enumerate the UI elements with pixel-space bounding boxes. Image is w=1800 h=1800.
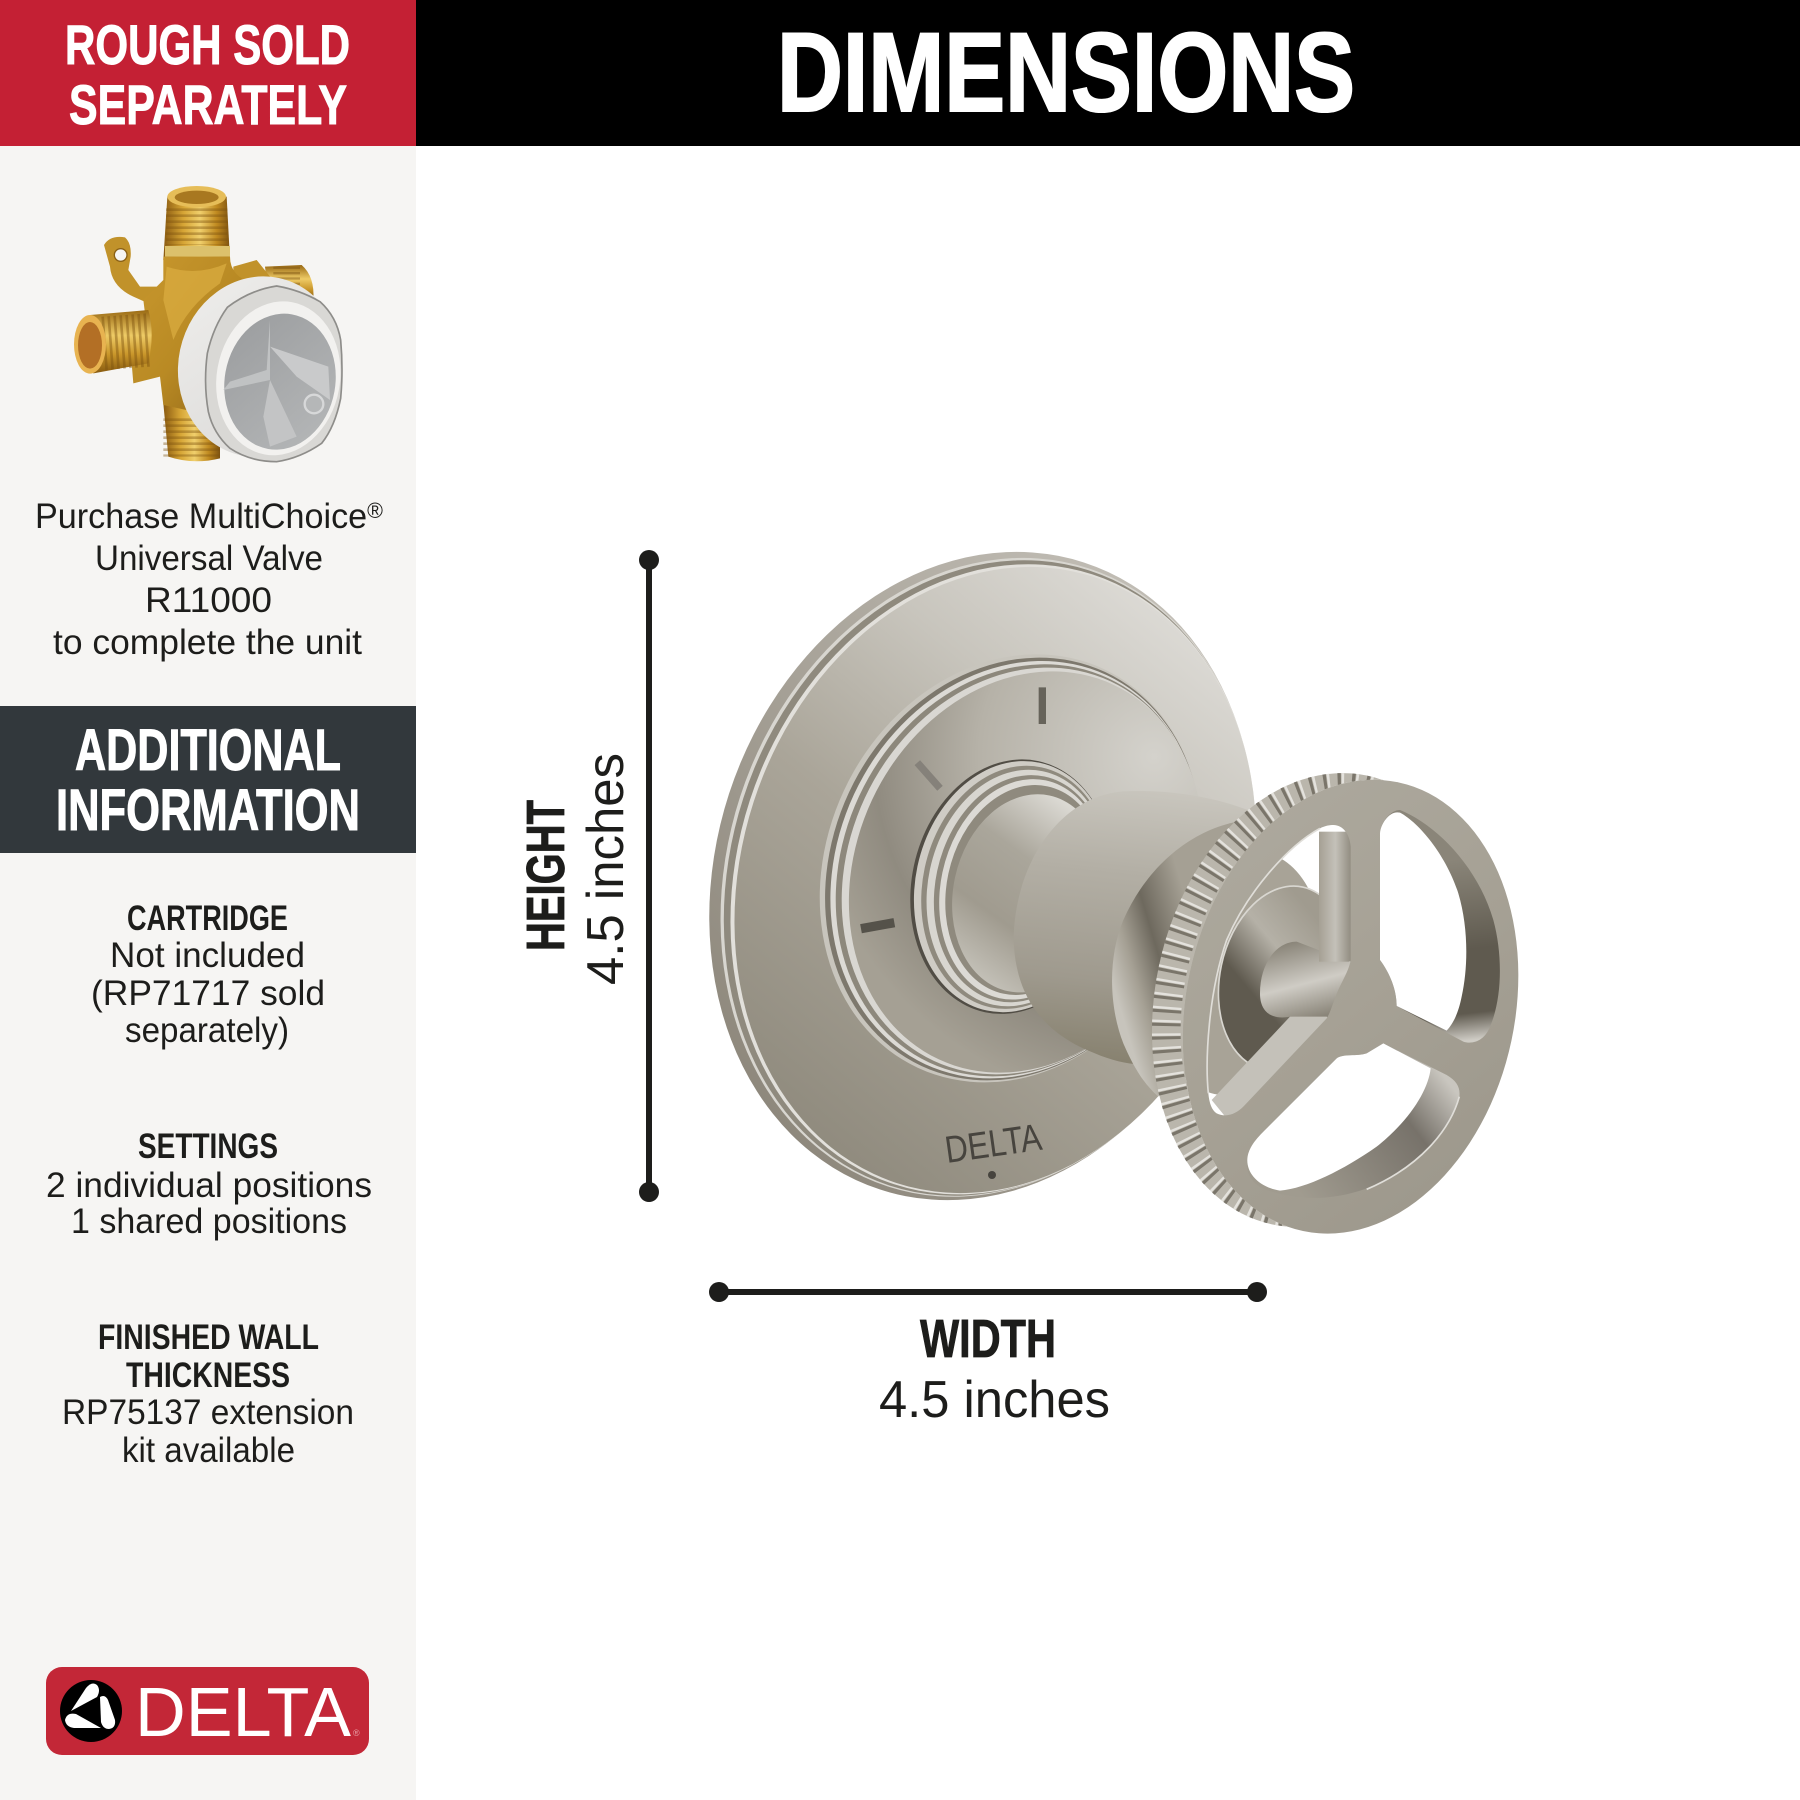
heading: rough sold: ROUGH SOLD [65,13,350,76]
upper right opening [1380,810,1500,1043]
label: width: WIDTH [920,1309,1056,1369]
collar rings [887,740,1136,1033]
hub flange [1112,819,1253,1097]
text block: finished wall thickness [62,1318,354,1470]
wheel back disc [1136,836,1344,1111]
text block: finished wall thickness: FINISHED WALL [98,1318,319,1357]
value: height: 4.5 inches [577,753,635,985]
text block: purchase valve: ® [367,498,383,523]
text block: settings: 1 shared positions [71,1202,347,1241]
arrow: width line [709,1282,1267,1302]
text block: purchase valve [35,497,383,662]
knurled rim [1152,773,1384,1227]
heading: additional: ADDITIONAL [75,718,341,783]
text block: cartridge: (RP71717 sold [91,974,325,1013]
dimension: height [516,550,659,1202]
icon: delta emblem [60,1680,122,1742]
banner: additional information [0,706,416,853]
icon: brass rough valve [74,186,359,472]
arrow: height line [639,550,659,1202]
text block: cartridge [91,899,325,1050]
title: DIMENSIONS [777,10,1355,135]
spoke walls behind wheel [1212,832,1352,1118]
engraved delta mark: DELTA [942,1117,1045,1172]
lower opening [1247,1043,1460,1198]
text block: finished wall thickness: RP75137 extension [62,1393,354,1432]
text block: settings: 2 individual positions [46,1166,372,1205]
text block: purchase valve: Universal Valve [95,539,323,578]
dimension: width [709,1282,1267,1429]
rim highlight [1207,828,1320,1093]
heading: information: INFORMATION [56,778,360,843]
logo: delta [46,1667,369,1755]
label: height: HEIGHT [516,800,576,951]
inner disc with ridge [751,591,1270,1145]
wordmark: DELTA [135,1673,351,1751]
banner: rough sold separately [0,0,416,146]
banner: dimensions title [416,0,1800,146]
text block: cartridge: CARTRIDGE [127,899,288,938]
knob hub [1014,791,1275,1064]
panel: sidebar background [0,0,416,1800]
text block: finished wall thickness: THICKNESS [126,1356,290,1395]
text block: finished wall thickness: kit available [122,1431,295,1470]
escutcheon plate [627,480,1337,1272]
text block: settings: SETTINGS [138,1127,278,1166]
text block: purchase valve: to complete the unit [53,623,362,662]
wheel face with left opening [1183,780,1518,1234]
text block: purchase valve: Purchase MultiChoice [35,497,375,536]
inner recess disc [1202,874,1365,1083]
text block: settings [46,1127,372,1241]
value: width: 4.5 inches [879,1371,1110,1429]
position tick marks [861,687,1042,929]
text block: cartridge: separately) [125,1011,289,1050]
heading: separately: SEPARATELY [69,73,347,136]
product: wheel handle trim [709,552,1518,1234]
text block: cartridge: Not included [110,936,305,975]
logo: delta: ® [353,1728,360,1738]
text block: purchase valve: R11000 [145,581,272,620]
